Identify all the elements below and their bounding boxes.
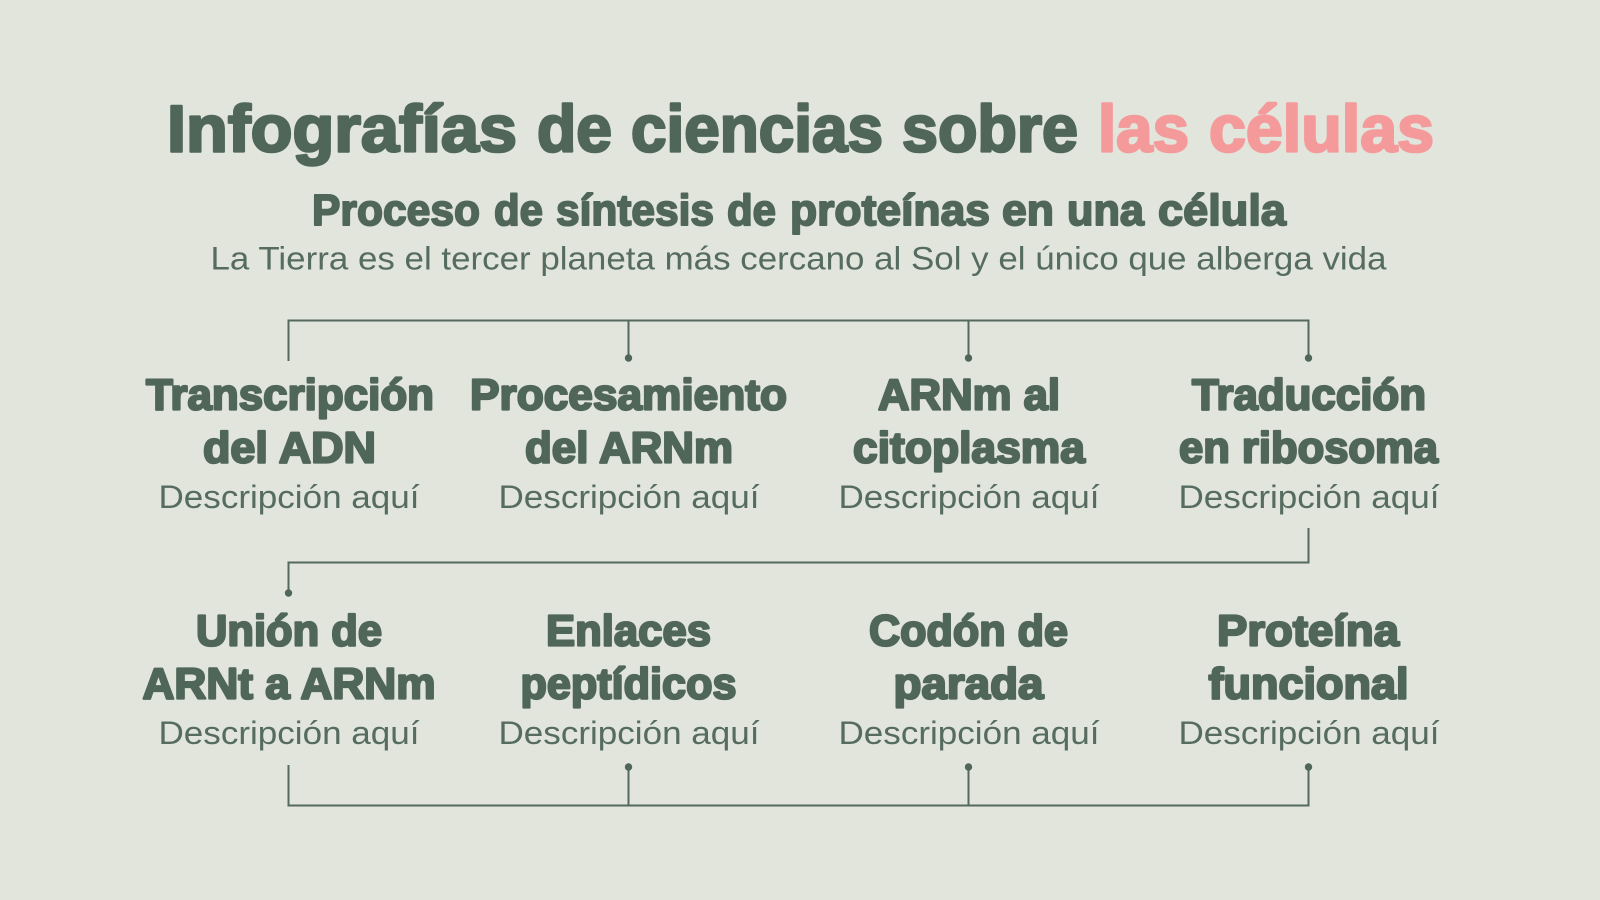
step 5: Unión de ARNt a ARNm: Descripción aquí xyxy=(158,715,420,751)
step 7: Codón de parada: parada xyxy=(894,660,1044,708)
step 4: Traducción en ribosoma xyxy=(1178,370,1440,515)
step 3: ARNm al citoplasma: ARNm al xyxy=(878,370,1060,420)
step 1: Transcripción del ADN: Descripción aquí xyxy=(158,479,420,515)
title: sobre xyxy=(902,92,1078,166)
step 6: Enlaces peptídicos: peptídicos xyxy=(520,660,736,708)
step 7: Codón de parada: Descripción aquí xyxy=(838,715,1100,751)
step 2: Procesamiento del ARNm: Procesamiento xyxy=(470,370,787,420)
subtitle: Proceso xyxy=(312,186,480,235)
step 8: Proteína funcional: funcional xyxy=(1208,660,1408,708)
title: de xyxy=(537,92,612,166)
step 6: Enlaces peptídicos: Enlaces xyxy=(546,606,711,656)
step 4: Traducción en ribosoma: Traducción xyxy=(1192,370,1426,420)
step 8: Proteína funcional xyxy=(1178,606,1440,751)
subtitle: de xyxy=(494,186,543,235)
step 6: Enlaces peptídicos: Descripción aquí xyxy=(498,715,760,751)
subtitle: una xyxy=(1067,186,1145,235)
step 3: ARNm al citoplasma xyxy=(838,370,1100,515)
step 4: Traducción en ribosoma: Descripción aquí xyxy=(1178,479,1440,515)
step 2: Procesamiento del ARNm: Descripción aquí xyxy=(498,479,760,515)
step 6: Enlaces peptídicos xyxy=(498,606,760,751)
title: ciencias xyxy=(631,92,883,166)
step 3: ARNm al citoplasma: citoplasma xyxy=(853,424,1086,472)
step 7: Codón de parada xyxy=(838,606,1100,751)
step 8: Proteína funcional: Descripción aquí xyxy=(1178,715,1440,751)
subtitle: síntesis xyxy=(556,186,714,235)
step 5: Unión de ARNt a ARNm xyxy=(142,606,436,751)
subtitle: de xyxy=(727,186,776,235)
subtitle: célula xyxy=(1158,186,1287,235)
step 2: Procesamiento del ARNm: del ARNm xyxy=(525,424,733,472)
step 4: Traducción en ribosoma: en ribosoma xyxy=(1179,424,1439,472)
title: células xyxy=(1209,92,1434,166)
title xyxy=(167,92,1434,166)
connector: bottom bracket xyxy=(288,763,1312,806)
connector: middle bracket xyxy=(285,528,1308,597)
step 1: Transcripción del ADN: Transcripción xyxy=(146,370,434,420)
step 1: Transcripción del ADN xyxy=(146,370,434,515)
step 2: Procesamiento del ARNm xyxy=(470,370,787,515)
step 7: Codón de parada: Codón de xyxy=(869,606,1068,656)
step 8: Proteína funcional: Proteína xyxy=(1217,606,1400,656)
step 5: Unión de ARNt a ARNm: ARNt a ARNm xyxy=(142,660,436,708)
subtitle: en xyxy=(1002,186,1054,235)
description: La Tierra es el tercer planeta más cercano al Sol y el único que alberga vida xyxy=(210,240,1387,276)
step 1: Transcripción del ADN: del ADN xyxy=(203,424,376,472)
subtitle: proteínas xyxy=(790,186,990,235)
connector: top bracket xyxy=(288,320,1312,362)
step 5: Unión de ARNt a ARNm: Unión de xyxy=(196,606,382,656)
title: las xyxy=(1098,92,1189,166)
title: Infografías xyxy=(167,92,517,166)
subtitle xyxy=(312,186,1287,235)
step 3: ARNm al citoplasma: Descripción aquí xyxy=(838,479,1100,515)
